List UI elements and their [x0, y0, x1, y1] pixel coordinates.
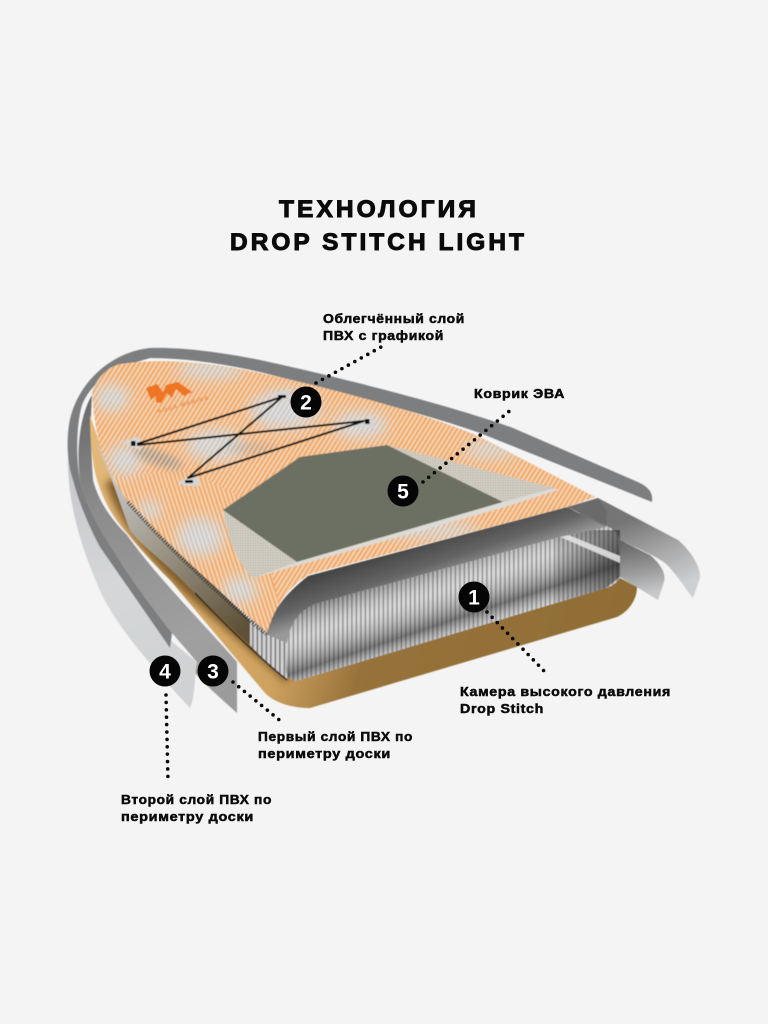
title: DROP STITCH LIGHT	[230, 229, 527, 256]
title: ТЕХНОЛОГИЯ	[279, 196, 479, 223]
drop stitch side ribs	[195, 593, 287, 680]
brand logo	[146, 382, 211, 415]
callout 4: second PVC layer: 4	[159, 660, 171, 684]
EVA pad light lower edge	[253, 488, 558, 578]
grey camouflage blobs	[94, 361, 518, 604]
orange patterned deck	[92, 360, 596, 633]
callout 2: PVC graphic layer	[290, 311, 465, 418]
EVA pad	[223, 445, 558, 578]
callout 3: first PVC layer: периметру доски	[258, 746, 391, 761]
EVA pad top face	[223, 445, 503, 562]
upper grey PVC strip wrapping the nose	[68, 348, 652, 648]
callout 5: EVA pad: Коврик ЭВА	[474, 386, 565, 401]
callout 1: drop stitch chamber: Камера высокого давления	[460, 684, 671, 699]
callout 2: PVC graphic layer: ПВХ с графикой	[323, 328, 444, 343]
callout 2: PVC graphic layer: 2	[300, 392, 312, 414]
callout 3: first PVC layer: 3	[207, 660, 219, 684]
drop stitch chamber front	[286, 526, 620, 681]
EVA pad side faces	[223, 445, 555, 578]
callout 5: EVA pad	[388, 386, 565, 506]
right ends of the PVC strips	[567, 498, 700, 600]
board cutaway illustration	[68, 348, 700, 713]
deck side wall	[95, 440, 287, 680]
callout 3: first PVC layer	[198, 656, 413, 761]
layer 3: first PVC strip	[78, 395, 237, 713]
callout 1: drop stitch chamber: Drop Stitch	[460, 701, 544, 716]
callout 4: second PVC layer	[121, 656, 272, 824]
tan bottom layer	[90, 415, 637, 708]
callout 1: drop stitch chamber	[458, 582, 671, 716]
title	[230, 196, 527, 256]
brand logo: AQUA MARINA	[157, 395, 211, 415]
callout 5: EVA pad: 5	[397, 480, 409, 504]
callout 1: drop stitch chamber: 1	[468, 586, 480, 610]
bungee cords	[137, 397, 364, 478]
bungee anchor points	[122, 389, 375, 486]
callout 3: first PVC layer: Первый слой ПВХ по	[258, 729, 413, 744]
callout 2: PVC graphic layer: Облегчённый слой	[323, 311, 465, 326]
layer 4: second outer PVC strip, lower left	[68, 440, 197, 708]
chamber top band	[265, 507, 607, 643]
deck stitching edge	[128, 502, 266, 634]
callout 4: second PVC layer: Второй слой ПВХ по	[121, 792, 272, 807]
callout 4: second PVC layer: периметру доски	[121, 809, 254, 824]
